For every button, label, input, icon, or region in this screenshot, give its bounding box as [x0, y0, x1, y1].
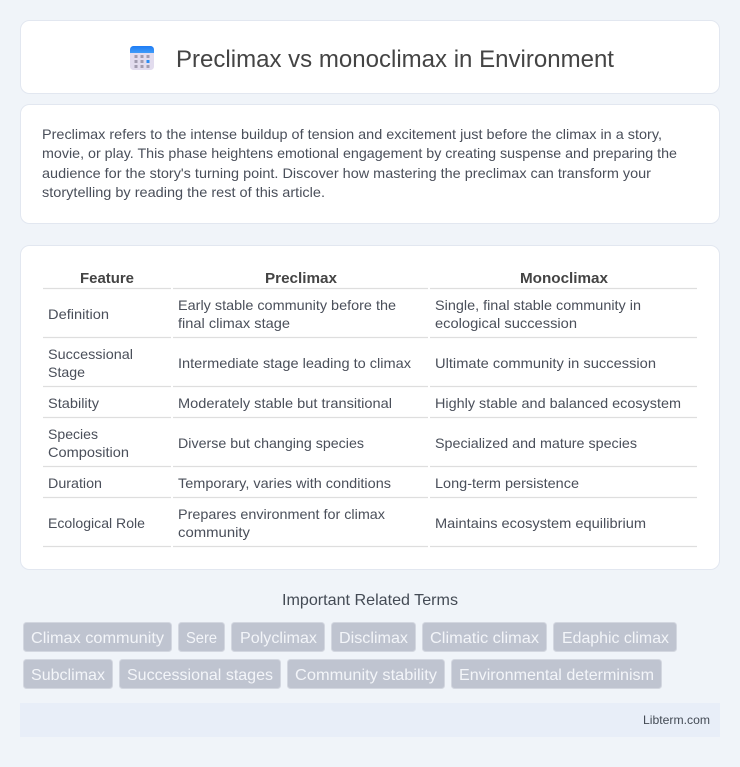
row: ecological role: Prepares environment for climax [178, 506, 385, 522]
tag: Climax community [31, 630, 164, 647]
row: successional stage: Successional [48, 346, 133, 362]
row: definition: Early stable community before the [178, 297, 396, 313]
row: definition: Definition [48, 306, 109, 322]
tag: Climatic climax [430, 630, 539, 647]
tag: Polyclimax [240, 630, 317, 647]
row: species composition: Species [48, 426, 98, 442]
panel: title header [20, 20, 720, 94]
panel: comparison table [20, 246, 720, 570]
table header: Feature [80, 271, 134, 287]
row: definition [48, 297, 641, 331]
table header [80, 271, 608, 287]
text block: intro: movie, or play. This phase heightens emotional engagement by creating suspense and preparing the [42, 145, 677, 161]
row: successional stage [48, 346, 656, 380]
footer [20, 703, 720, 737]
tag [332, 622, 416, 652]
text block: intro [42, 126, 677, 200]
tag: Subclimax [31, 667, 105, 684]
tags: related terms [24, 622, 676, 688]
row: species composition: Specialized and mature species [435, 435, 637, 451]
row: successional stage: Ultimate community in succession [435, 355, 656, 371]
heading: related terms: Important Related Terms [282, 592, 458, 609]
tag: Sere [186, 630, 217, 647]
tag [24, 660, 112, 688]
text block: intro: storytelling by reading the rest of this article. [42, 184, 325, 200]
row: definition: Single, final stable community in [435, 297, 641, 313]
tag [24, 622, 172, 652]
row: ecological role: Ecological Role [48, 515, 145, 531]
table header: Monoclimax [520, 271, 608, 287]
row: species composition: Composition [48, 444, 129, 460]
tag [452, 660, 662, 688]
tag [288, 660, 444, 688]
footer: Libterm.com [643, 713, 710, 727]
row: species composition [48, 426, 637, 460]
row: successional stage: Stage [48, 364, 85, 380]
row: duration: Temporary, varies with conditions [178, 475, 391, 491]
row: ecological role: community [178, 524, 250, 540]
tag [178, 622, 224, 652]
tag: Successional stages [127, 667, 273, 684]
row: duration [48, 475, 579, 491]
icon: calendar [130, 46, 154, 70]
tag [422, 622, 546, 652]
text block: intro: Preclimax refers to the intense buildup of tension and excitement just before the climax in a story, [42, 126, 662, 142]
row: duration: Duration [48, 475, 102, 491]
tag: Edaphic climax [562, 630, 669, 647]
text block: intro: audience for the story's turning point. Discover how mastering the preclimax can transform your [42, 165, 651, 181]
table header: Preclimax [265, 271, 337, 287]
row: definition: final climax stage [178, 315, 290, 331]
row: stability: Moderately stable but transitional [178, 395, 392, 411]
tag [232, 622, 324, 652]
row: definition: ecological succession [435, 315, 577, 331]
row: duration: Long-term persistence [435, 475, 579, 491]
row: species composition: Diverse but changing species [178, 435, 364, 451]
row: ecological role: Maintains ecosystem equilibrium [435, 515, 646, 531]
tag [120, 660, 280, 688]
row: ecological role [48, 506, 646, 540]
tag: Community stability [295, 667, 437, 684]
row: stability: Highly stable and balanced ecosystem [435, 395, 681, 411]
tag: Environmental determinism [459, 667, 654, 684]
row: successional stage: Intermediate stage leading to climax [178, 355, 411, 371]
tag [554, 622, 676, 652]
row: stability [48, 395, 681, 411]
tag: Disclimax [339, 630, 408, 647]
row: stability: Stability [48, 395, 99, 411]
title: Preclimax vs monoclimax in Environment [176, 46, 614, 73]
panel: intro paragraph [20, 104, 720, 224]
